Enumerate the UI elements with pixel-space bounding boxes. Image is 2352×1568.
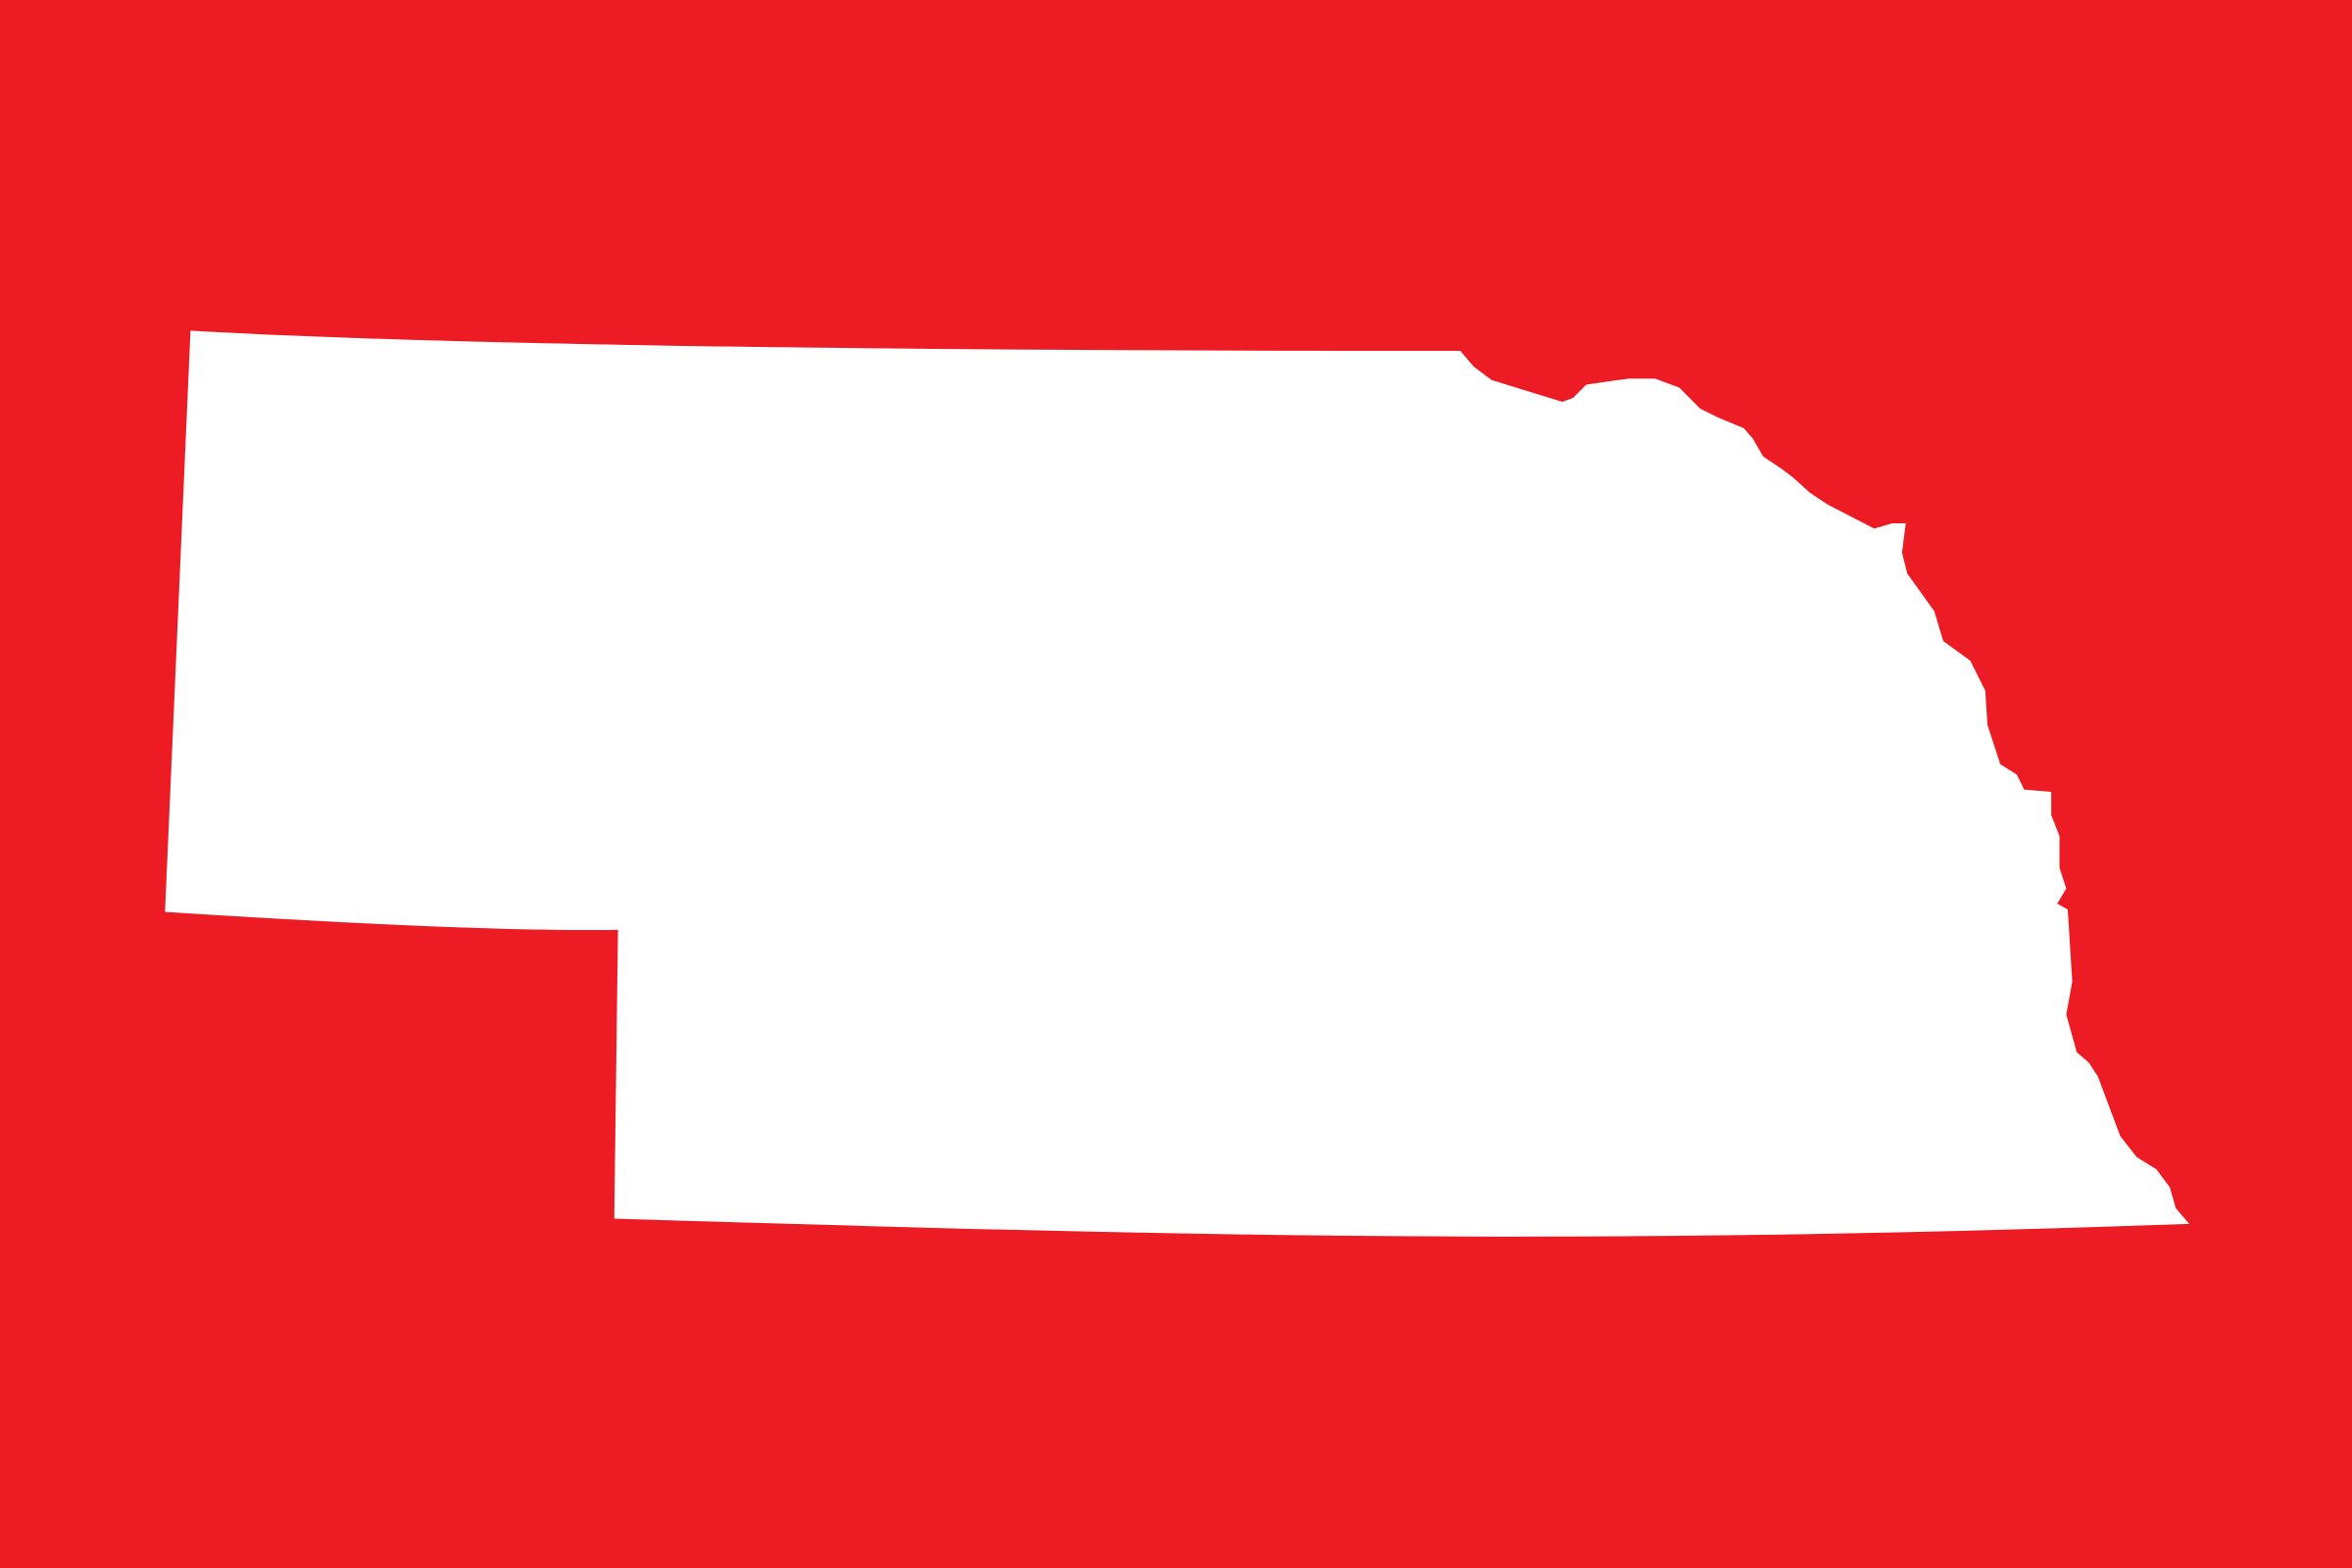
icon: white silhouette of Nebraska [165,330,2189,1237]
